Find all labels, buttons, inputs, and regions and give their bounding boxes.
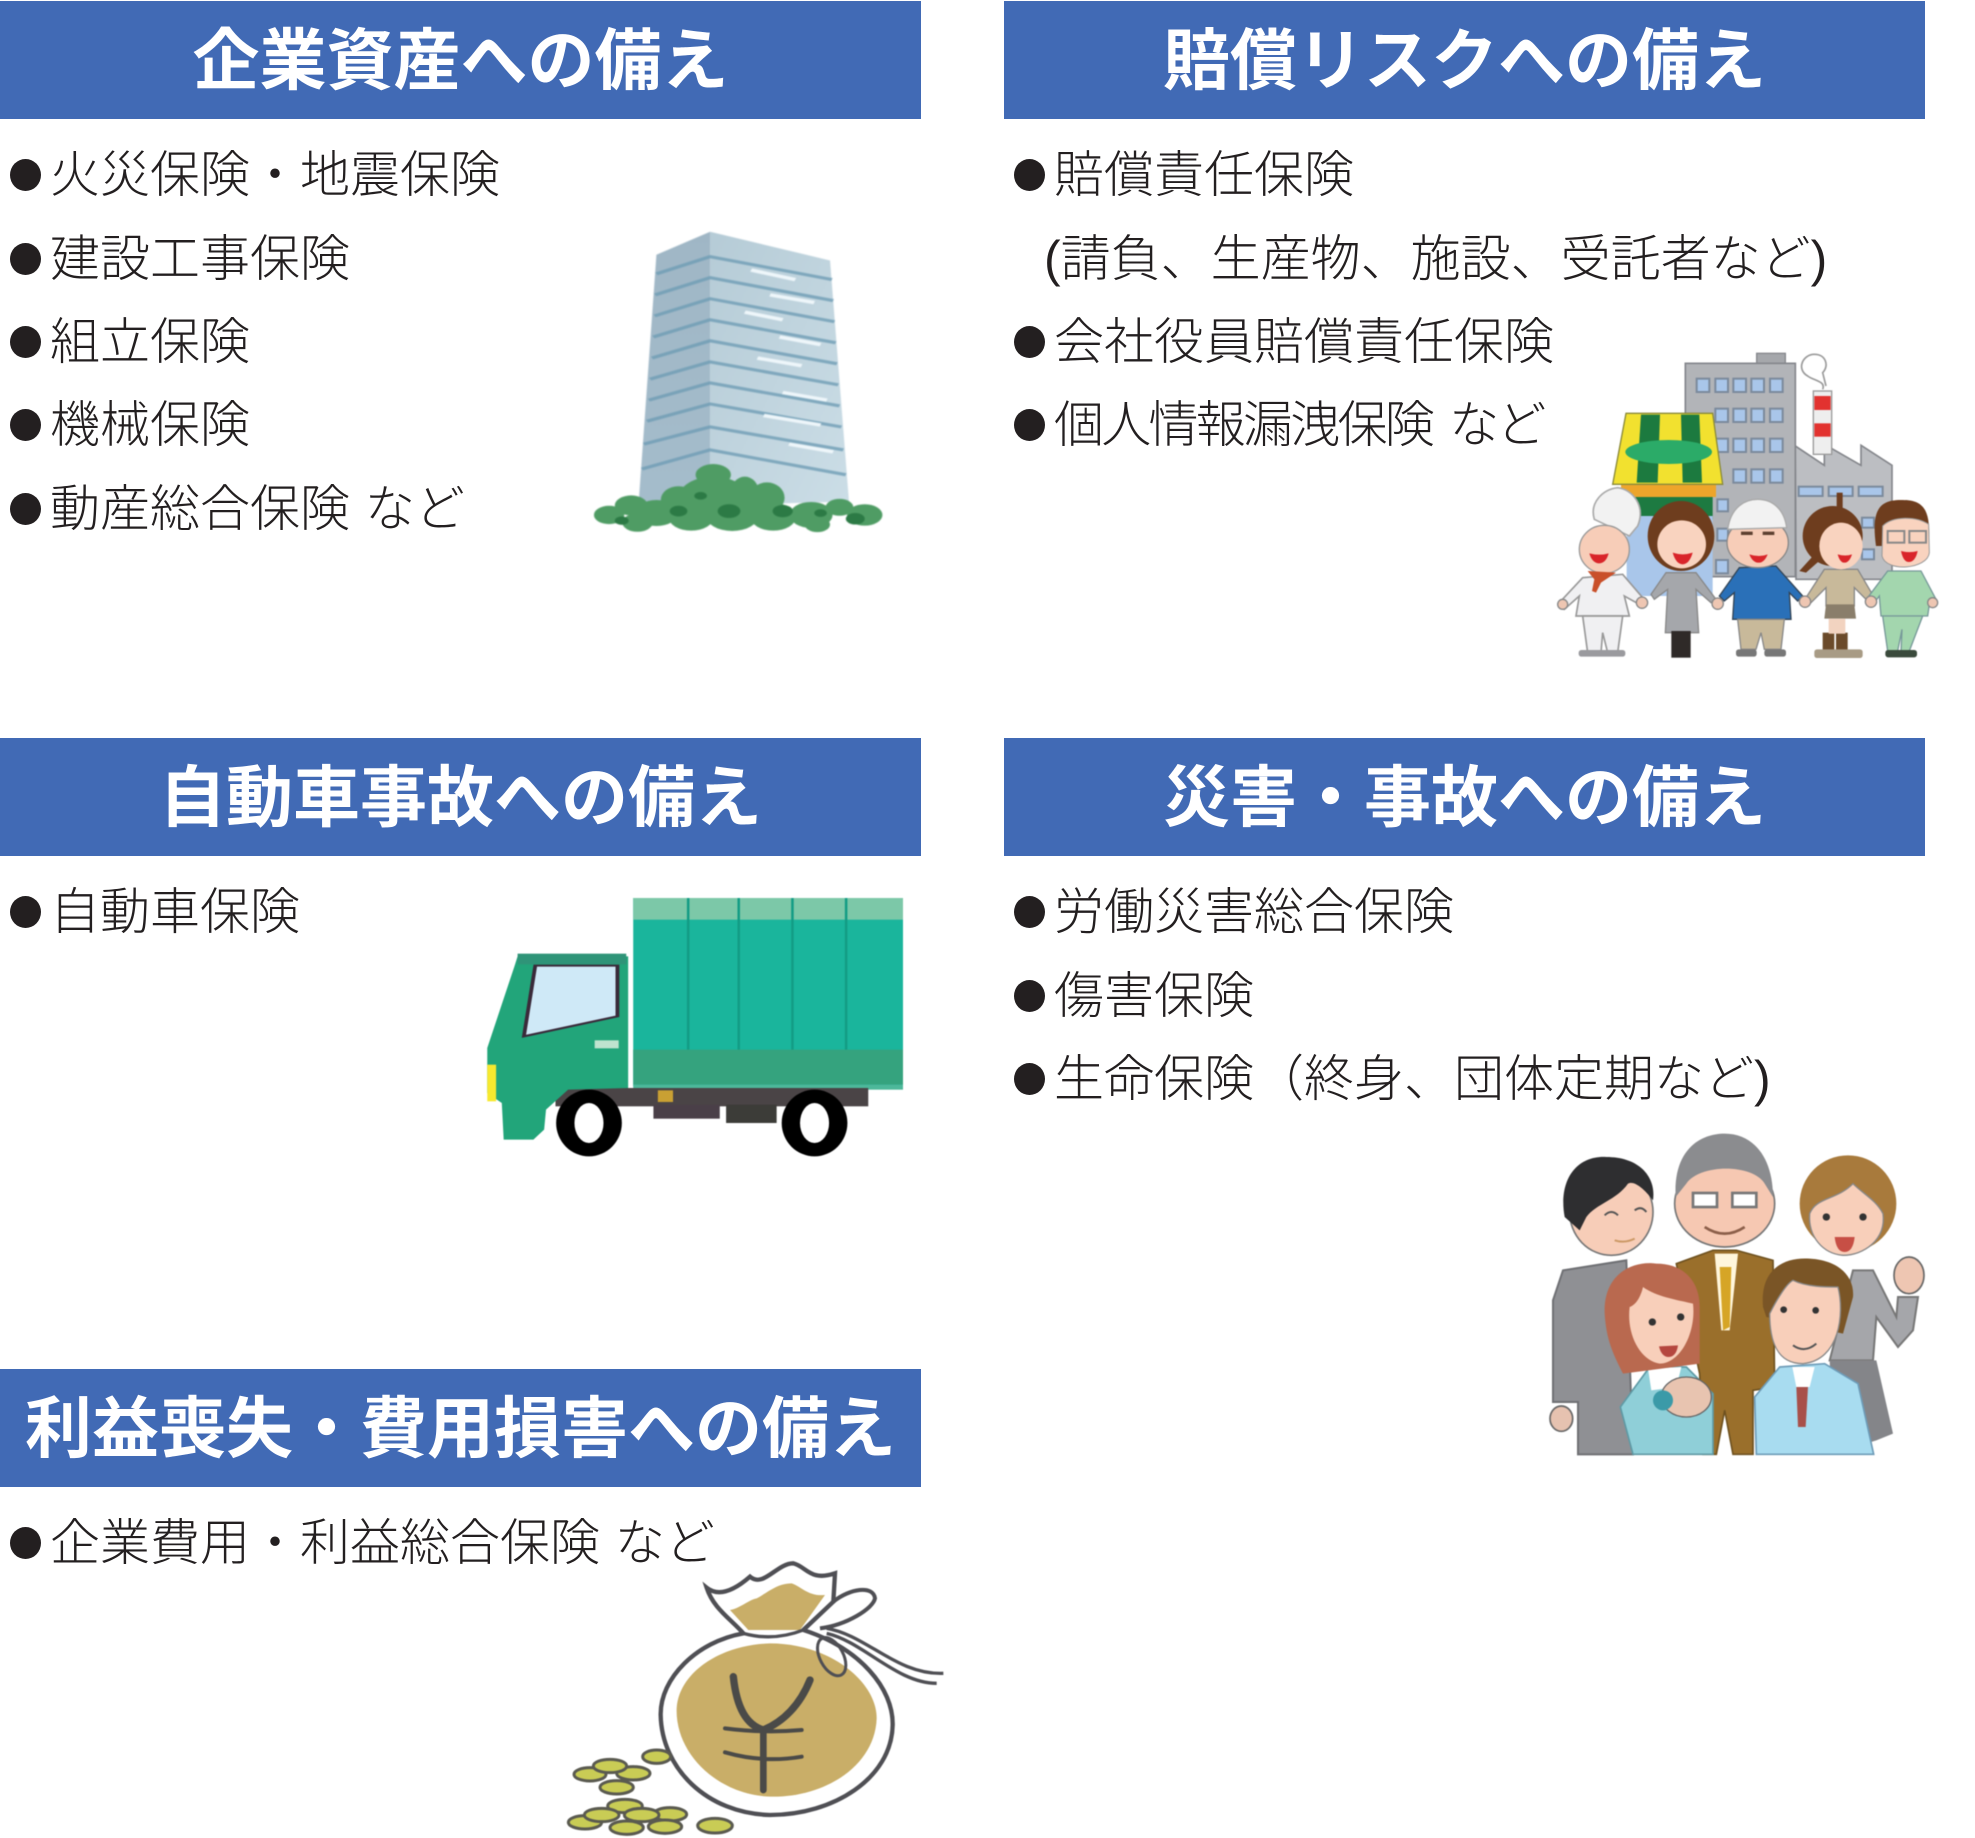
- item: expenses and profit: 企業費用・利益総合保険 など: [50, 1515, 715, 1571]
- back left man: [1550, 1157, 1653, 1454]
- heading: disaster and accident: 災害・事故への備え: [1163, 761, 1766, 836]
- panel: disaster and accident: [1004, 738, 1926, 1456]
- heading: corporate assets: [0, 1, 921, 119]
- front right man: [1755, 1258, 1874, 1454]
- item: liability: 賠償責任保険: [1054, 147, 1354, 203]
- icon: green truck: [486, 897, 904, 1158]
- icon: workers in front of buildings: [1556, 352, 1939, 659]
- item: workers compensation: 労働災害総合保険: [1054, 884, 1454, 940]
- icon: group of five office workers: [1548, 1133, 1926, 1456]
- heading: automobile accident: 自動車事故への備え: [159, 761, 762, 836]
- item: automobile: 自動車保険: [50, 884, 300, 940]
- joined hands: [1558, 596, 1938, 609]
- heading: disaster and accident: [1004, 738, 1925, 856]
- heading: business interruption and expenses: 利益喪失・費用損害への備え: [25, 1392, 896, 1467]
- item: movable property: 動産総合保険 など: [50, 481, 465, 537]
- item: liability detail: (請負、生産物、施設、受託者など): [1044, 231, 1827, 287]
- list: disaster insurance: [1014, 884, 1771, 1107]
- item: data leak: 個人情報漏洩保険 など: [1054, 397, 1544, 453]
- item: directors liability: 会社役員賠償責任保険: [1054, 314, 1554, 370]
- item: construction: 建設工事保険: [50, 231, 350, 287]
- panel: automobile accident: [0, 738, 921, 1158]
- girl in work clothes: [1799, 493, 1874, 658]
- center older man: [1675, 1134, 1775, 1454]
- item: injury: 傷害保険: [1054, 968, 1254, 1024]
- heading: automobile accident: [0, 738, 921, 856]
- panel: business interruption and expenses: [0, 1369, 944, 1837]
- list: corporate assets insurance: [10, 147, 500, 537]
- builder: [1719, 499, 1803, 657]
- heading: business interruption and expenses: [0, 1369, 921, 1487]
- list: expense and profit insurance: [10, 1515, 715, 1571]
- icon: yen money bag and coins: [566, 1560, 944, 1837]
- panel: liability risk: [1004, 1, 1939, 659]
- item: assembly: 組立保険: [50, 314, 250, 370]
- item: machinery: 機械保険: [50, 397, 250, 453]
- chef: [1559, 488, 1643, 657]
- heading: corporate assets: 企業資産への備え: [192, 24, 728, 99]
- item: life: 生命保険（終身、団体定期など): [1054, 1051, 1771, 1107]
- item: fire and earthquake: 火災保険・地震保険: [50, 147, 500, 203]
- man in green uniform: [1868, 500, 1936, 657]
- back right woman: [1800, 1155, 1924, 1454]
- list: liability insurance: [1014, 147, 1827, 453]
- list: automobile insurance: [10, 884, 300, 940]
- panel: corporate assets: [0, 1, 921, 537]
- heading: liability risk: [1004, 1, 1925, 119]
- heading: liability risk: 賠償リスクへの備え: [1163, 24, 1766, 99]
- icon: office tower with trees: [593, 231, 884, 534]
- front left woman: [1605, 1263, 1713, 1454]
- woman in grey uniform: [1648, 501, 1716, 658]
